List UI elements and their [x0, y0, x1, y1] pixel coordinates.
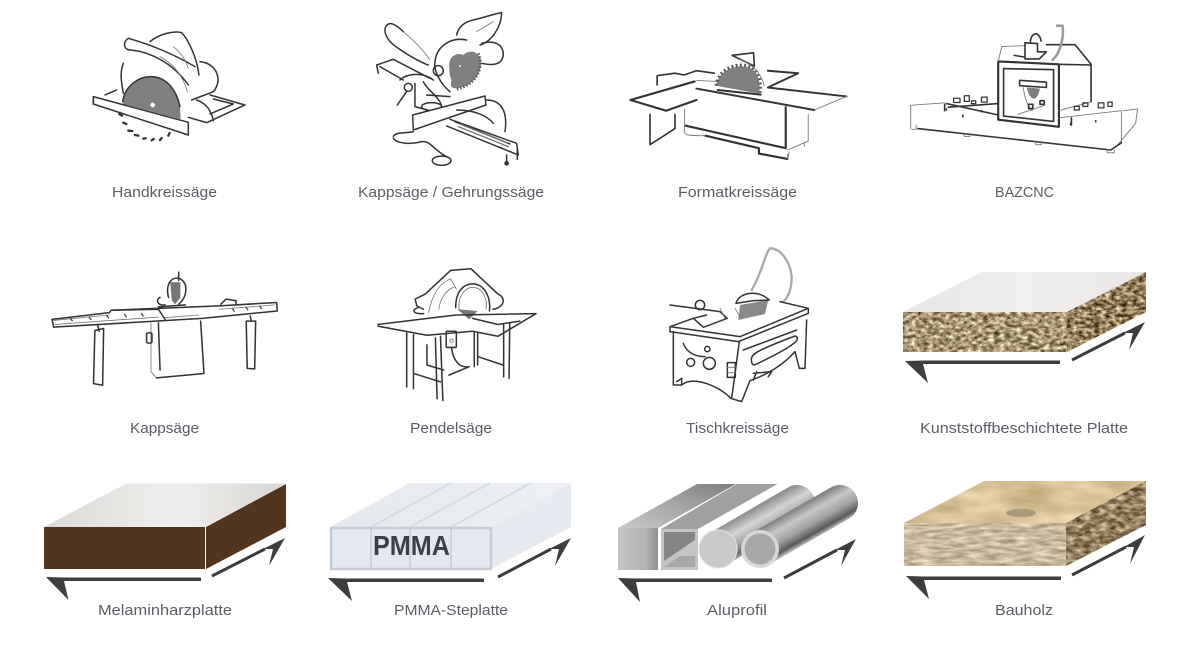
board side: [206, 484, 286, 569]
label: BAZCNC: [995, 184, 1054, 201]
square tube: [661, 484, 778, 570]
sheet side: [491, 483, 571, 569]
round tube: [741, 503, 840, 568]
timber top: [904, 481, 1146, 523]
panel: PMMA-Steplatte: [328, 483, 571, 619]
board front: chipboard: [903, 312, 1067, 352]
arrows: dimensions: [618, 539, 856, 602]
panel: Formatkreissäge: [630, 53, 846, 201]
panel: BAZCNC: [911, 26, 1137, 201]
label: Kunststoffbeschichtete Platte: [920, 420, 1128, 437]
panel: Bauholz: [904, 481, 1146, 619]
round rod: [699, 503, 797, 568]
panel: Kappsäge: [52, 272, 277, 437]
icon: cross-cut saw with rail: [52, 272, 277, 385]
label: Aluprofil: [707, 602, 767, 619]
icon: miter saw: [377, 13, 518, 166]
timber side: [1066, 481, 1146, 566]
knot: [1006, 509, 1036, 517]
label: Bauholz: [995, 602, 1053, 619]
square bar: [618, 484, 736, 570]
panel: Kunststoffbeschichtete Platte: [903, 272, 1146, 437]
board side: chipboard: [1067, 272, 1146, 352]
arrows: dimensions: [905, 322, 1145, 383]
label: Handkreissäge: [112, 184, 217, 201]
panel: Kappsäge / Gehrungssäge: [358, 13, 544, 201]
PMMA lettering: PMMA: [373, 530, 450, 561]
arrows: dimensions: [328, 538, 571, 601]
label: Kappsäge / Gehrungssäge: [358, 184, 544, 201]
board top: white laminate: [903, 272, 1146, 312]
label: Melaminharzplatte: [98, 602, 232, 619]
board top: [44, 484, 286, 527]
label: Tischkreissäge: [686, 420, 789, 437]
panel: Aluprofil: [618, 484, 856, 619]
panel: Pendelsäge: [378, 269, 536, 437]
icon: table saw: [670, 248, 808, 402]
label: Formatkreissäge: [678, 184, 797, 201]
sheet front: [331, 528, 491, 569]
timber front: [904, 523, 1066, 566]
panel: Tischkreissäge: [670, 248, 808, 437]
arrows: dimensions: [906, 535, 1145, 599]
icon: panel saw: [630, 53, 846, 159]
icon: hand circular saw: [93, 32, 245, 140]
arrows: dimensions: [46, 538, 285, 600]
panel: Melaminharzplatte: [44, 484, 286, 619]
label: PMMA-Steplatte: [394, 602, 508, 619]
label: Pendelsäge: [410, 420, 492, 437]
board front: [44, 527, 205, 569]
sheet top with ribs: [330, 483, 571, 527]
panel: Handkreissäge: [93, 32, 245, 201]
icon: pendulum saw: [378, 269, 536, 400]
label: Kappsäge: [130, 420, 199, 437]
front of round rod: [699, 530, 737, 568]
icon: CNC machining centre: [911, 26, 1137, 153]
